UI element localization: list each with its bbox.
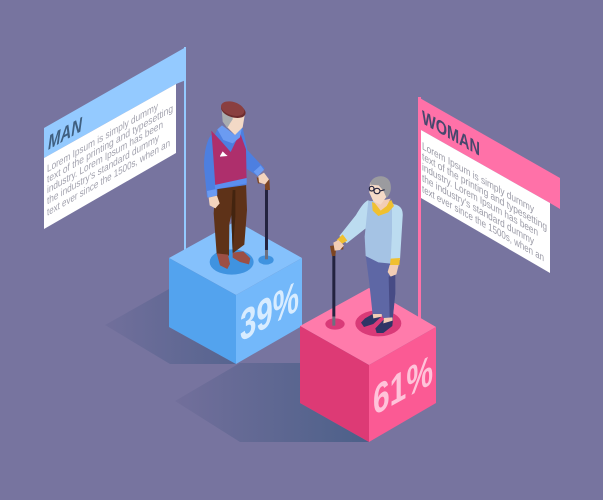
head and hair <box>222 108 245 135</box>
torso shirt <box>213 127 247 189</box>
cuff: left <box>337 234 347 245</box>
cube top: pink <box>300 288 436 365</box>
right arm <box>243 145 265 176</box>
cube left face: pink <box>300 326 369 442</box>
sweater torso <box>365 201 397 264</box>
cube left face: blue <box>169 258 236 364</box>
left arm <box>204 134 219 197</box>
figure: elderly woman with cane <box>325 176 403 336</box>
cube: pink 61% <box>300 288 436 442</box>
floor spot: cane <box>258 255 274 265</box>
heading: MAN: MAN <box>48 112 82 155</box>
cap <box>219 99 247 121</box>
cane <box>330 244 343 326</box>
vest <box>211 131 247 187</box>
collar <box>217 125 242 143</box>
text block: man description: industry. Lorem Ipsum has been <box>47 119 163 196</box>
cane <box>257 177 270 259</box>
pocket square <box>220 151 228 157</box>
legs <box>366 255 395 319</box>
text block: woman description <box>422 141 547 264</box>
percentage: 61%: 61% <box>373 345 433 425</box>
flag: woman <box>418 97 560 319</box>
text block: man description: text of the printing and typesetting <box>47 103 173 186</box>
heading: WOMAN: WOMAN <box>422 106 480 161</box>
text block: woman description: the industry's standard dummy <box>422 173 534 248</box>
text block: woman description: text of the printing and typesetting <box>422 151 547 234</box>
cube right face: pink <box>369 327 436 442</box>
glasses <box>369 186 385 194</box>
text block: man description: Lorem Ipsum is simply dummy <box>47 101 158 175</box>
shadow: blue cube <box>105 289 236 364</box>
flag: man <box>44 47 186 251</box>
shirt hem <box>215 178 247 189</box>
text block: woman description: text ever since the 1500s, when an <box>422 184 544 264</box>
cube right face: blue <box>236 258 302 364</box>
text block: woman description: Lorem Ipsum is simply dummy <box>422 141 534 216</box>
legs <box>214 182 247 256</box>
right sleeve <box>391 204 403 260</box>
hand: left <box>333 240 344 251</box>
flag band: man <box>44 47 186 158</box>
cuff: right <box>390 258 400 265</box>
flag pole: woman <box>418 97 421 319</box>
left hand <box>209 196 220 208</box>
flag panel: woman <box>421 130 550 273</box>
floor spot: woman <box>355 310 401 336</box>
shoes <box>217 251 250 269</box>
shadow: pink cube <box>175 363 369 442</box>
flag pole: man <box>184 47 186 251</box>
flag panel: man <box>44 84 176 229</box>
floor spot: man <box>210 249 254 275</box>
right hand <box>258 173 269 184</box>
collar <box>372 200 394 216</box>
cube: blue 39% <box>169 221 302 364</box>
cube top: blue <box>169 221 302 295</box>
floor spot: cane <box>325 318 345 330</box>
text block: man description: text ever since the 1500s, when an <box>47 138 170 219</box>
percentage: 39%: 39% <box>240 270 299 351</box>
left arm and sleeve <box>339 200 370 243</box>
text block: woman description: industry. Lorem Ipsum has been <box>422 162 538 239</box>
flag band: woman <box>418 97 560 209</box>
shoes <box>361 314 393 333</box>
figure: elderly man with cane <box>204 99 274 275</box>
text block: man description: the industry's standard dummy <box>47 132 159 207</box>
hand: right <box>388 265 399 277</box>
head and hair <box>369 176 391 205</box>
